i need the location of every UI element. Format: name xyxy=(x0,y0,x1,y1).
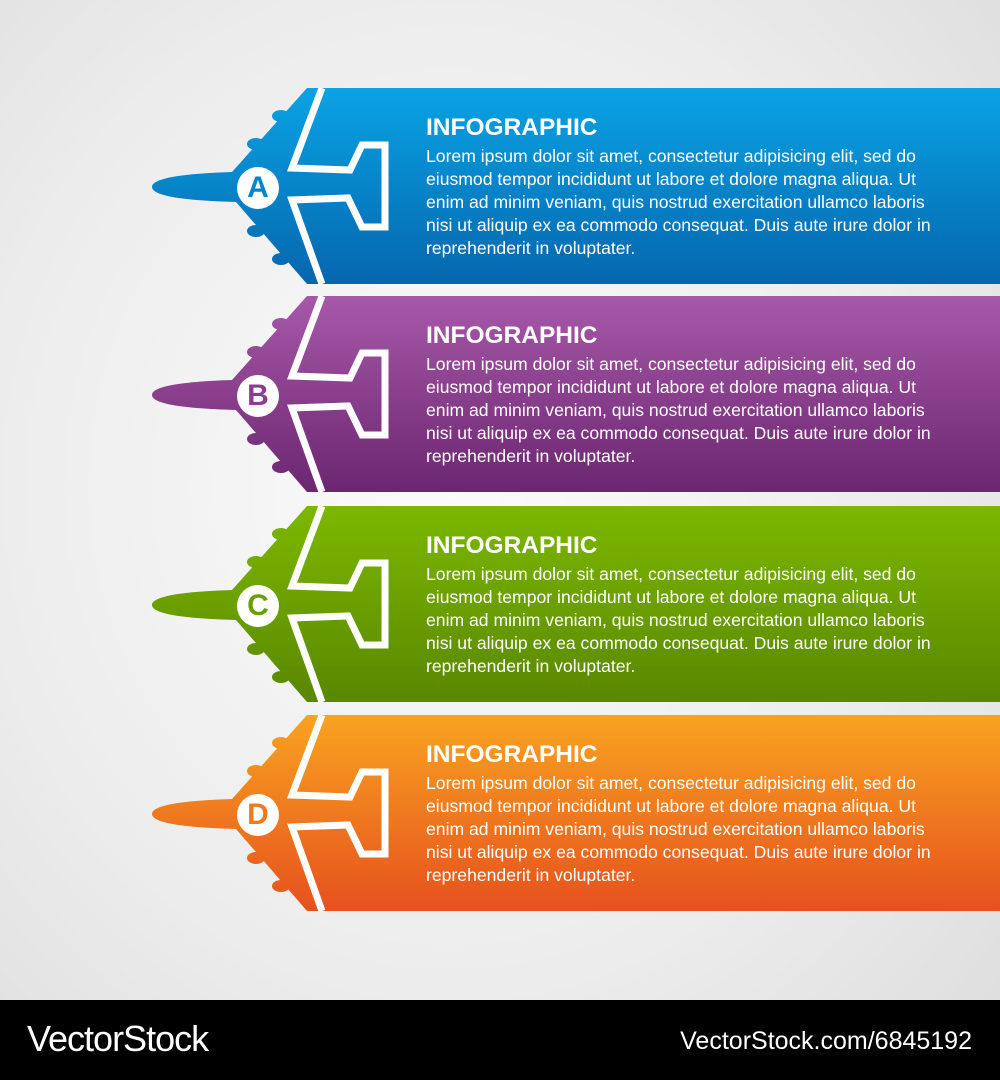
text D: INFOGRAPHIC xyxy=(426,741,598,768)
plane banner A xyxy=(152,88,1000,285)
badge B: B xyxy=(247,379,269,412)
text B: reprehenderit in voluptater. xyxy=(426,446,635,466)
text A: enim ad minim veniam, quis nostrud exercitation ullamco laboris xyxy=(426,192,925,212)
panel: D xyxy=(152,715,1000,912)
text D: reprehenderit in voluptater. xyxy=(426,865,635,885)
text A xyxy=(426,114,931,258)
text D: nisi ut aliquip ex ea commodo consequat. Duis aute irure dolor in xyxy=(426,842,931,862)
panel: C xyxy=(152,506,1000,703)
text B: nisi ut aliquip ex ea commodo consequat. Duis aute irure dolor in xyxy=(426,423,931,443)
text D: Lorem ipsum dolor sit amet, consectetur adipisicing elit, sed do xyxy=(426,773,916,793)
text C xyxy=(426,532,931,676)
text C: enim ad minim veniam, quis nostrud exercitation ullamco laboris xyxy=(426,610,925,630)
badge B xyxy=(237,375,279,417)
footer logo: VectorStock xyxy=(27,1018,208,1059)
text D xyxy=(426,741,931,885)
text B: INFOGRAPHIC xyxy=(426,322,598,349)
text C: nisi ut aliquip ex ea commodo consequat. Duis aute irure dolor in xyxy=(426,633,931,653)
panel: A xyxy=(152,88,1000,285)
text A: reprehenderit in voluptater. xyxy=(426,238,635,258)
badge C: C xyxy=(247,589,269,622)
text A: eiusmod tempor incididunt ut labore et dolore magna aliqua. Ut xyxy=(426,169,916,189)
badge A xyxy=(237,167,279,209)
text B: eiusmod tempor incididunt ut labore et dolore magna aliqua. Ut xyxy=(426,377,916,397)
badge D: D xyxy=(247,798,269,831)
text C: eiusmod tempor incididunt ut labore et dolore magna aliqua. Ut xyxy=(426,587,916,607)
footer url: VectorStock.com/6845192 xyxy=(680,1027,972,1055)
text A: nisi ut aliquip ex ea commodo consequat. Duis aute irure dolor in xyxy=(426,215,931,235)
text B: Lorem ipsum dolor sit amet, consectetur adipisicing elit, sed do xyxy=(426,354,916,374)
panel: B xyxy=(152,296,1000,492)
text A: INFOGRAPHIC xyxy=(426,114,598,141)
text D: enim ad minim veniam, quis nostrud exercitation ullamco laboris xyxy=(426,819,925,839)
badge A: A xyxy=(247,171,269,204)
plane banner B xyxy=(152,296,1000,492)
footer xyxy=(0,1000,1000,1080)
plane banner D xyxy=(152,715,1000,912)
plane banner C xyxy=(152,506,1000,703)
text C: Lorem ipsum dolor sit amet, consectetur adipisicing elit, sed do xyxy=(426,564,916,584)
text C: reprehenderit in voluptater. xyxy=(426,656,635,676)
text B: enim ad minim veniam, quis nostrud exercitation ullamco laboris xyxy=(426,400,925,420)
text D: eiusmod tempor incididunt ut labore et dolore magna aliqua. Ut xyxy=(426,796,916,816)
badge D xyxy=(237,794,279,836)
text C: INFOGRAPHIC xyxy=(426,532,598,559)
text B xyxy=(426,322,931,466)
text A: Lorem ipsum dolor sit amet, consectetur adipisicing elit, sed do xyxy=(426,146,916,166)
badge C xyxy=(237,585,279,627)
